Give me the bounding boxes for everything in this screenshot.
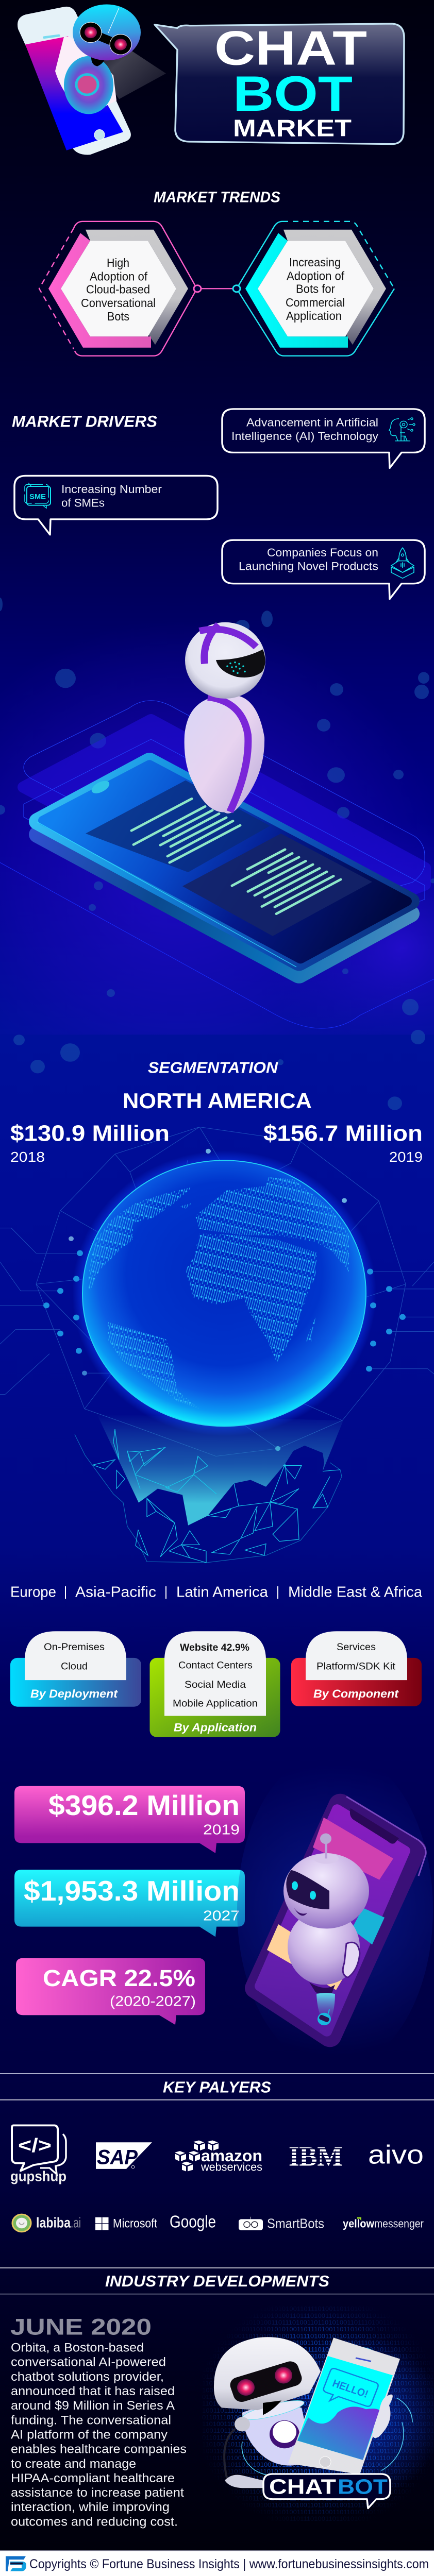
binary code backdrop: 1101001101101010100110111010011011010100110111010011011010101001 — [202, 2360, 434, 2367]
icon: SME bubble: SME — [29, 493, 46, 501]
binary code backdrop: 1001101110100110110101010011011101001101101010011011101001101101 — [202, 2366, 434, 2374]
footer bar — [0, 2550, 434, 2576]
binary code backdrop: 0110111010011011010101001101110100110110101001101110100110110101 — [202, 2495, 434, 2502]
binary code backdrop: 1001101110100110110101010011011101001101101010011011101001101101 — [202, 2468, 434, 2475]
binary code backdrop: 0110111010011011010101001101110100110110101001101110100110110101 — [202, 2394, 434, 2400]
binary code backdrop: 1001101110100110110101010011011101001101101010011011101001101101 — [202, 2448, 434, 2455]
globe — [72, 1150, 376, 1436]
text: other regions: Latin America — [176, 1584, 268, 1600]
illustration: purple phone with robot — [237, 1750, 433, 2070]
text: trend 2: Adoption of — [287, 269, 344, 283]
logo: aivo: aivo — [368, 2141, 424, 2170]
text block: orbita funding: interaction, while improving — [11, 2500, 170, 2514]
callout: 2019 market size: 2019 — [203, 1822, 240, 1838]
panel: by application: By Application — [174, 1721, 257, 1734]
text: trend 1: Conversational — [81, 297, 156, 310]
binary code backdrop: 1001101110100110110101010011011101001101101010011011101001101101 — [202, 2407, 434, 2414]
logo: gupshup: gupshup — [10, 2168, 66, 2184]
logo: yellowmessenger: yellow — [343, 2217, 375, 2230]
icon: hello bubble — [320, 2367, 379, 2414]
text: trend 1: High — [107, 257, 129, 270]
callout: CAGR: (2020-2027) — [110, 1993, 196, 2009]
heading band: key players: KEY PALYERS — [163, 2078, 272, 2096]
text: trend 2 — [286, 256, 345, 323]
text: trend 1 — [81, 257, 156, 324]
text: trend 1: Bots — [107, 310, 129, 324]
binary code backdrop: 1101001101101010100110111010011011010100110111010011011010101001 — [202, 2319, 434, 2326]
text block: orbita funding: conversational AI-powered — [11, 2355, 166, 2369]
text block: orbita funding: assistance to increase patient — [11, 2486, 184, 2500]
icon: rocket box — [391, 548, 414, 578]
logo: labiba.ai — [12, 2214, 81, 2232]
panel: by component: Services — [337, 1641, 376, 1653]
text block: orbita funding: around $9 Million in Series A — [11, 2399, 175, 2413]
callout: AI technology: Intelligence (AI) Technology — [231, 430, 378, 443]
stat: 2019 North America — [263, 1122, 423, 1165]
binary code backdrop: 1001101110100110110101010011011101001101101010011011101001101101 — [202, 2346, 434, 2353]
logo: SmartBots: SmartBots — [267, 2215, 324, 2231]
callout: SMEs — [14, 476, 218, 535]
robot head — [214, 2337, 321, 2415]
icon: hello bubble: HELLO! — [331, 2377, 370, 2400]
heading: June 2020: JUNE 2020 — [10, 2314, 152, 2340]
callout: novel products — [222, 540, 425, 599]
callout: 2027 market size: 2027 — [203, 1908, 240, 1924]
binary code backdrop: 1101001101101010100110111010011011010100110111010011011010101001 — [202, 2380, 434, 2387]
callout: SMEs: of SMEs — [61, 496, 105, 509]
text: other regions: Middle East & Africa — [288, 1584, 422, 1600]
binary code backdrop — [202, 2306, 434, 2522]
badge: chatbot: BOT — [338, 2475, 388, 2498]
binary code backdrop: 1001101110100110110101010011011101001101101010011011101001101101 — [202, 2509, 434, 2516]
logo: amazon web services: webservices — [201, 2160, 262, 2173]
logo: IBM: IBM — [289, 2141, 343, 2172]
icon: small bot — [318, 2009, 331, 2025]
panel: by deployment: By Deployment — [30, 1687, 118, 1700]
panel: by application: Contact Centers — [178, 1660, 253, 1671]
binary code backdrop: 1001101110100110110101010011011101001101101010011011101001101101 — [202, 2387, 434, 2394]
binary code backdrop: 0110111010011011010101001101110100110110101001101110100110110101 — [202, 2353, 434, 2360]
background glow and connection lines — [0, 619, 434, 1035]
binary code backdrop: 0110111010011011010101001101110100110110101001101110100110110101 — [202, 2454, 434, 2462]
panel: by application: Social Media — [185, 1680, 246, 1690]
callout: 2019 market size — [14, 1786, 245, 1853]
logo: SmartBots — [239, 2215, 324, 2231]
phone top face — [38, 761, 410, 962]
binary code backdrop: 0110111010011011010101001101110100110110101001101110100110110101 — [202, 2475, 434, 2482]
callout: 2027 market size: $1,953.3 Million — [24, 1875, 240, 1907]
logo: amazon web services: amazon — [201, 2146, 262, 2165]
icon: AI head — [389, 418, 415, 441]
binary code backdrop: 1101001101101010100110111010011011010100110111010011011010101001 — [202, 2502, 434, 2509]
text block: orbita funding: AI platform of the company — [11, 2428, 168, 2442]
continents — [89, 1177, 349, 1409]
callout: novel products: Launching Novel Products — [239, 560, 378, 572]
callout: SMEs: Increasing Number — [61, 483, 162, 496]
logo: labiba.ai: .ai — [71, 2215, 81, 2231]
title: BOT: BOT — [233, 66, 353, 122]
title: MARKET: MARKET — [233, 115, 352, 142]
text block: orbita funding: enables healthcare companies — [11, 2442, 187, 2456]
binary code backdrop: 0110111010011011010101001101110100110110101001101110100110110101 — [202, 2414, 434, 2421]
stat: 2019 North America: 2019 — [389, 1149, 423, 1165]
text block: orbita funding: to create and manage — [11, 2456, 136, 2471]
cable and base — [224, 2429, 278, 2488]
binary code backdrop: 0110111010011011010101001101110100110110101001101110100110110101 — [202, 2333, 434, 2340]
badge: chatbot — [263, 2474, 390, 2509]
text block: orbita funding: chatbot solutions provider, — [11, 2370, 164, 2384]
text: trend 1: Adoption of — [90, 270, 147, 283]
heading: market trends: MARKET TRENDS — [154, 188, 280, 206]
text: trend 2: Commercial — [286, 296, 345, 310]
network nodes — [43, 1149, 406, 1451]
panel: by deployment — [10, 1631, 141, 1707]
callout: AI technology — [222, 409, 425, 468]
callout: CAGR — [16, 1958, 205, 2025]
binary code backdrop: 1101001101101010100110111010011011010100110111010011011010101001 — [202, 2400, 434, 2408]
robot body — [235, 2397, 306, 2466]
screen panel 1 — [86, 781, 270, 872]
binary code backdrop: 1101001101101010100110111010011011010100110111010011011010101001 — [202, 2420, 434, 2428]
logo: Google: Google — [170, 2212, 216, 2231]
text: other regions — [10, 1584, 422, 1600]
heading: market drivers: MARKET DRIVERS — [12, 412, 157, 430]
panel: by application: Website 42.9% — [180, 1642, 249, 1653]
binary code backdrop: 0110111010011011010101001101110100110110101001101110100110110101 — [202, 2434, 434, 2441]
panel: by application: Mobile Application — [173, 1698, 258, 1709]
phone side — [38, 774, 410, 975]
robot — [283, 1834, 369, 2026]
callout: CAGR: CAGR 22.5% — [43, 1965, 195, 1991]
callout: novel products: Companies Focus on — [267, 546, 378, 559]
text: trend 2: Bots for — [296, 282, 335, 296]
glowing rings — [242, 2347, 412, 2476]
logo: Microsoft: Microsoft — [113, 2216, 157, 2230]
text block: orbita funding: outcomes and reducing cost. — [11, 2515, 178, 2529]
floating dots — [0, 598, 434, 1110]
connector between hexagons — [194, 285, 240, 292]
icon: Fortune Business Insights logo — [6, 2556, 26, 2571]
panel: by deployment: On-Premises — [44, 1641, 105, 1653]
phone screen — [43, 765, 407, 959]
binary code backdrop: 0110111010011011010101001101110100110110101001101110100110110101 — [202, 2312, 434, 2319]
stat: 2018 North America — [10, 1122, 170, 1165]
binary code backdrop: 1001101110100110110101010011011101001101101010011011101001101101 — [202, 2428, 434, 2434]
network lines around globe — [0, 1127, 434, 1456]
binary code backdrop: 0110111010011011010101001101110100110110101001101110100110110101 — [202, 2373, 434, 2380]
logo: amazon web services — [175, 2140, 262, 2173]
title speech bubble — [155, 21, 404, 144]
logo: SAP — [96, 2142, 152, 2169]
logo: gupshup — [10, 2125, 66, 2184]
panel: trend hexagon pink — [39, 222, 197, 356]
screen panel 2 — [182, 834, 372, 936]
panel: by deployment: Cloud — [61, 1661, 88, 1672]
binary code backdrop: 1001101110100110110101010011011101001101101010011011101001101101 — [202, 2306, 434, 2313]
logo: SAP: SAP — [97, 2146, 138, 2168]
text block: orbita funding: Orbita, a Boston-based — [11, 2341, 144, 2354]
text block: orbita funding: funding. The conversational — [11, 2413, 171, 2427]
logo: Microsoft — [95, 2216, 157, 2230]
text: other regions: Europe — [10, 1584, 56, 1600]
text: other regions: Asia-Pacific — [75, 1584, 156, 1600]
binary code backdrop: 1101001101101010100110111010011011010100110111010011011010101001 — [202, 2441, 434, 2448]
icon: bot body — [55, 37, 116, 114]
logo: gupshup: </> — [18, 2135, 52, 2157]
header illustration: phone and bot — [18, 4, 166, 155]
icon: light beam — [71, 11, 166, 99]
text: trend 2: Increasing — [289, 256, 341, 269]
illustration: standing robot — [185, 622, 265, 814]
callout: 2019 market size: $396.2 Million — [48, 1790, 240, 1821]
stat: 2019 North America: $156.7 Million — [263, 1122, 423, 1146]
text: trend 1: Cloud-based — [86, 283, 150, 296]
translucent planes — [24, 701, 425, 959]
panel: trend hexagon cyan — [237, 222, 394, 356]
robot head — [185, 622, 265, 699]
binary code backdrop: 1101001101101010100110111010011011010100110111010011011010101001 — [202, 2482, 434, 2488]
title: CHAT: CHAT — [214, 21, 367, 75]
stat: 2018 North America: 2018 — [10, 1149, 45, 1165]
logo: yellowmessenger — [343, 2217, 424, 2230]
text: trend 2: Application — [286, 310, 342, 323]
panel: by application — [149, 1631, 280, 1737]
callout: 2027 market size — [14, 1870, 245, 1937]
logo: labiba.ai: labiba — [36, 2215, 71, 2231]
icon: bot head — [73, 4, 141, 60]
binary code backdrop: 1001101110100110110101010011011101001101101010011011101001101101 — [202, 2488, 434, 2495]
binary code backdrop: 1101001101101010100110111010011011010100110111010011011010101001 — [202, 2340, 434, 2346]
binary code backdrop: 1101001101101010100110111010011011010100110111010011011010101001 — [202, 2461, 434, 2468]
phone — [288, 2337, 400, 2475]
panel: by component: By Component — [313, 1687, 399, 1700]
binary code backdrop: 1001101110100110110101010011011101001101101010011011101001101101 — [202, 2326, 434, 2333]
text block: orbita funding — [11, 2341, 187, 2529]
illustration: isometric phone — [24, 701, 425, 975]
badge: chatbot: CHAT — [269, 2475, 337, 2498]
phone screen — [260, 1809, 405, 2031]
binary code backdrop: 0110111010011011010101001101110100110110101001101110100110110101 — [202, 2515, 434, 2522]
callout: AI technology: Advancement in Artificial — [246, 416, 378, 429]
panel: by component: Platform/SDK Kit — [316, 1661, 395, 1672]
stat: 2018 North America: $130.9 Million — [10, 1122, 170, 1146]
logo: yellowmessenger: messenger — [374, 2217, 424, 2230]
illustration: wireframe hand with light beam — [75, 1414, 343, 1563]
text block: orbita funding: HIPAA-compliant healthcare — [11, 2471, 175, 2485]
icon: tilted phone — [18, 7, 131, 155]
heading band: industry developments: INDUSTRY DEVELOPMENTS — [105, 2272, 330, 2290]
heading: north america: NORTH AMERICA — [123, 1089, 312, 1113]
panel: by component — [291, 1631, 422, 1706]
robot body — [185, 695, 264, 814]
icon: SME bubble — [25, 483, 51, 508]
phone frame — [256, 1804, 415, 2037]
heading: segmentation: SEGMENTATION — [148, 1058, 278, 1076]
text block: orbita funding: announced that it has raised — [11, 2384, 175, 2398]
illustration: robot with hello phone — [214, 2337, 412, 2509]
